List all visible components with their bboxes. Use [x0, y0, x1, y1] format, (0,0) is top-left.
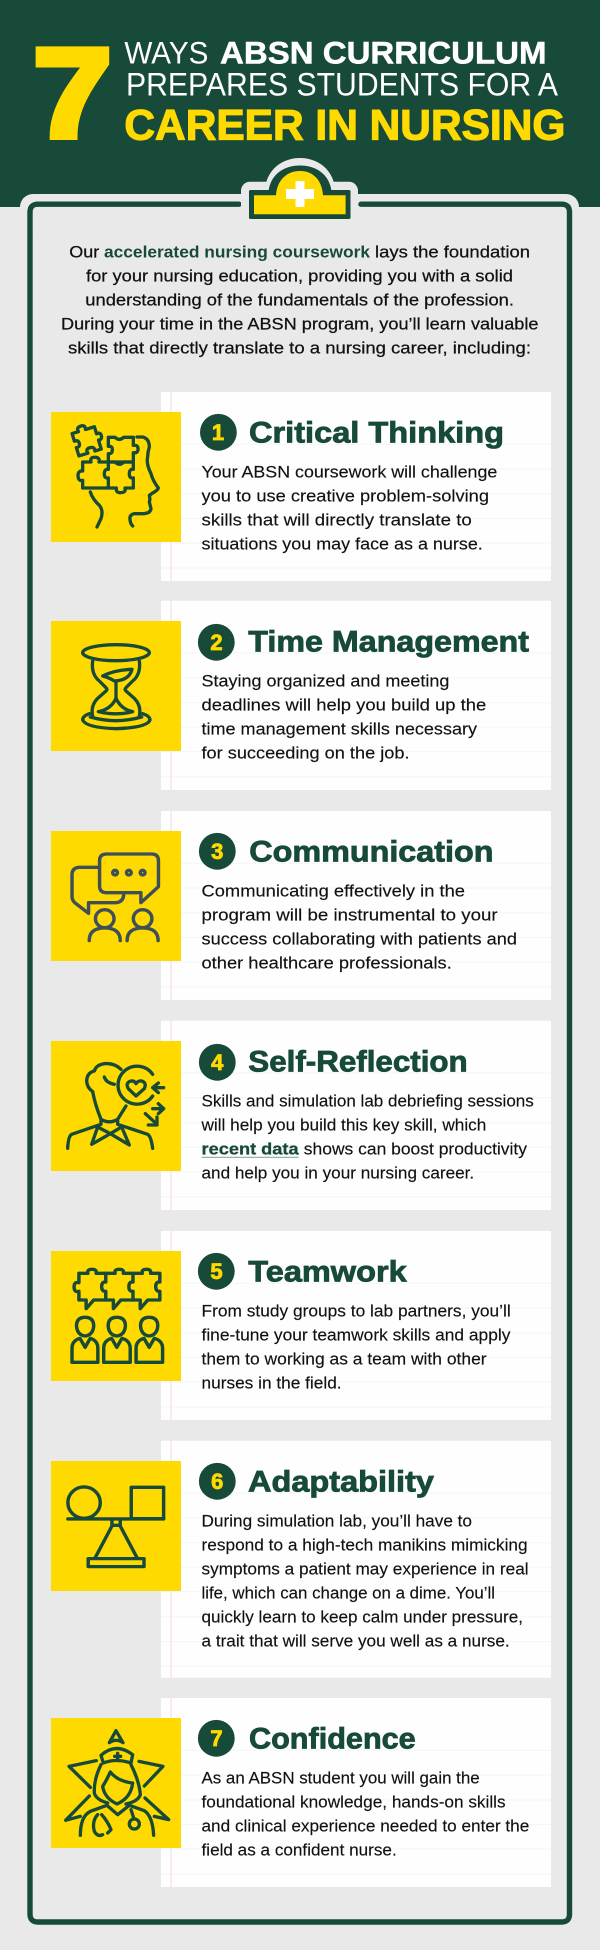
intro text: for your nursing education, providing you with a solid — [86, 267, 513, 286]
body text — [200, 1092, 534, 1183]
icon: nursing cap badge — [241, 158, 358, 227]
body text: nurses in the field. — [202, 1374, 342, 1393]
body text: Staying organized and meeting — [202, 672, 449, 691]
intro text: understanding of the fundamentals of the profession. — [85, 291, 514, 310]
number badge 1 — [200, 414, 237, 451]
body text: During simulation lab, you’ll have to — [202, 1512, 472, 1531]
intro text: During your time in the ABSN program, you’ll learn valuable — [61, 315, 538, 334]
body text: respond to a high-tech manikins mimicking — [202, 1536, 528, 1555]
link: recent data: recent data — [202, 1140, 299, 1159]
body text: Skills and simulation lab debriefing sessions — [202, 1092, 534, 1111]
intro text: skills that directly translate to a nursing career, including: — [68, 339, 531, 358]
body text: situations you may face as a nurse. — [202, 535, 483, 554]
number badge 2 — [198, 624, 235, 661]
panel: adaptability — [51, 1441, 551, 1678]
body text — [202, 882, 517, 973]
intro line 1: Our — [69, 243, 100, 262]
title line 1: ABSN CURRICULUM — [220, 34, 546, 70]
number badge 1: 1 — [212, 420, 224, 445]
number badge 3 — [199, 833, 236, 870]
notebook card — [161, 601, 551, 790]
body text: As an ABSN student you will gain the — [202, 1769, 480, 1788]
body text — [202, 1769, 529, 1860]
icon: self reflection person — [51, 1041, 181, 1171]
notebook card — [161, 1231, 551, 1420]
title line 2: PREPARES STUDENTS FOR A — [126, 67, 559, 103]
body text: other healthcare professionals. — [202, 954, 452, 973]
number badge 4: 4 — [211, 1050, 224, 1075]
icon: balance scale — [51, 1461, 181, 1591]
intro line 1: lays the foundation — [375, 243, 530, 262]
body text — [202, 672, 486, 763]
body text — [202, 1512, 529, 1651]
intro text — [61, 243, 538, 358]
body text: field as a confident nurse. — [202, 1841, 397, 1860]
number badge 4 — [199, 1044, 236, 1081]
body text: deadlines will help you build up the — [202, 696, 486, 715]
icon: hourglass — [51, 621, 181, 751]
body text: will help you build this key skill, which — [200, 1116, 486, 1135]
number badge 5: 5 — [210, 1259, 223, 1284]
icon: puzzle head — [51, 412, 181, 542]
title line 1: WAYS — [124, 34, 208, 70]
number badge 2: 2 — [210, 630, 223, 655]
number badge 5 — [198, 1253, 235, 1290]
body text: quickly learn to keep calm under pressure, — [202, 1608, 523, 1627]
body text: Communicating effectively in the — [202, 882, 465, 901]
heading: Confidence — [249, 1722, 416, 1755]
intro line 1: accelerated nursing coursework — [104, 243, 371, 262]
icon: nurse with star — [51, 1718, 181, 1848]
panel: confidence — [51, 1698, 551, 1887]
panel: critical thinking — [51, 392, 551, 581]
title — [34, 22, 565, 164]
heading: Critical Thinking — [249, 416, 504, 449]
body text: shows can boost productivity — [304, 1140, 528, 1159]
number badge 3: 3 — [211, 839, 223, 864]
number badge 6 — [199, 1463, 236, 1500]
panel: communication — [51, 811, 551, 1000]
body text: and clinical experience needed to enter the — [202, 1817, 529, 1836]
body text — [202, 463, 497, 554]
number badge 7 — [198, 1720, 235, 1757]
number badge 7: 7 — [210, 1726, 223, 1751]
body text: foundational knowledge, hands-on skills — [202, 1793, 506, 1812]
body text: and help you in your nursing career. — [202, 1164, 474, 1183]
heading: Time Management — [248, 626, 529, 659]
heading: Communication — [249, 836, 494, 869]
body text: program will be instrumental to your — [202, 906, 498, 925]
notebook card — [161, 1441, 551, 1678]
body text: life, which can change on a dime. You’ll — [202, 1584, 495, 1603]
heading: Adaptability — [248, 1466, 435, 1499]
icon: speech bubbles and people — [51, 831, 181, 961]
notebook card — [161, 1698, 551, 1887]
body text: Your ABSN coursework will challenge — [202, 463, 497, 482]
notebook card — [161, 1021, 551, 1210]
heading: Teamwork — [248, 1256, 407, 1289]
heading: Self-Reflection — [248, 1046, 468, 1079]
icon: team puzzle people — [51, 1251, 181, 1381]
title line 3: CAREER IN NURSING — [124, 102, 565, 149]
body text: time management skills necessary — [202, 720, 478, 739]
panel: teamwork — [51, 1231, 551, 1420]
notebook card — [161, 811, 551, 1000]
panel: self-reflection — [51, 1021, 551, 1210]
body text: symptoms a patient may experience in real — [202, 1560, 529, 1579]
body text: success collaborating with patients and — [202, 930, 517, 949]
body text: a trait that will serve you well as a nurse. — [202, 1632, 510, 1651]
body text: you to use creative problem-solving — [202, 487, 489, 506]
body text: skills that will directly translate to — [202, 511, 472, 530]
body text: fine-tune your teamwork skills and apply — [202, 1326, 511, 1345]
body text — [202, 1302, 511, 1393]
intro line 1 — [69, 243, 530, 262]
panel: time management — [51, 601, 551, 790]
notebook card — [161, 392, 551, 581]
number badge 6: 6 — [211, 1469, 223, 1494]
body text: From study groups to lab partners, you’ll — [202, 1302, 511, 1321]
body text: for succeeding on the job. — [202, 744, 410, 763]
body text: them to working as a team with other — [202, 1350, 487, 1369]
big yellow 7: 7 — [34, 22, 112, 164]
